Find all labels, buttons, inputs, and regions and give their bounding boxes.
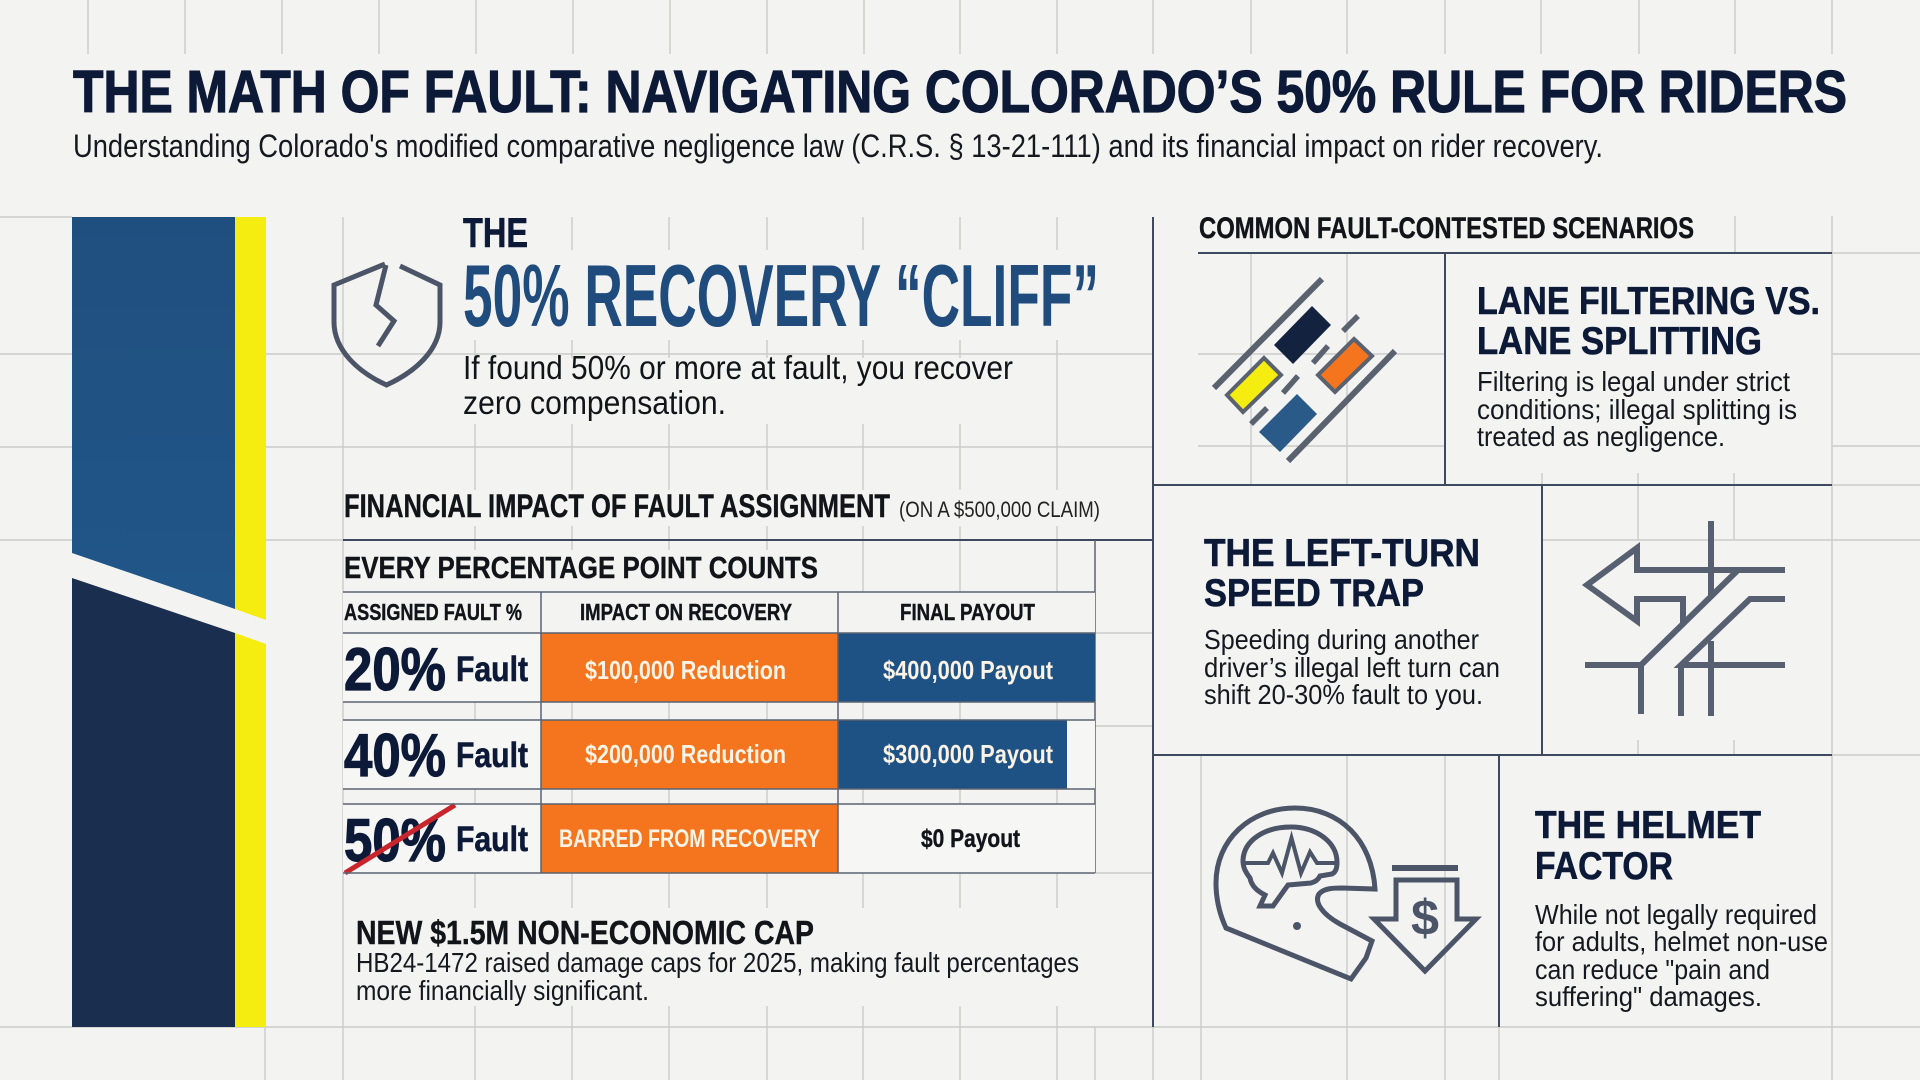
left turn text: Speeding during another — [1204, 624, 1479, 655]
row: 40% fault — [344, 720, 1067, 789]
table header row: IMPACT ON RECOVERY — [580, 599, 792, 625]
cliff description: If found 50% or more at fault, you recover — [463, 349, 1013, 386]
left turn text: SPEED TRAP — [1204, 572, 1424, 615]
table header row — [344, 599, 1035, 625]
icon: down arrow with dollar: $ — [1411, 890, 1439, 946]
callout: non-economic cap: HB24-1472 raised damage caps for 2025, making fault percentages — [356, 947, 1079, 978]
row: 40% fault: $200,000 Reduction — [585, 739, 786, 769]
callout: non-economic cap: more financially significant. — [356, 975, 649, 1006]
left turn text: driver’s illegal left turn can — [1204, 652, 1500, 683]
row: 40% fault: $300,000 Payout — [883, 739, 1053, 769]
helmet text — [1535, 804, 1828, 1012]
icon: down arrow with dollar — [1374, 868, 1476, 971]
row: 50% fault: $0 Payout — [921, 825, 1021, 853]
row: 40% fault: 40% — [344, 722, 446, 789]
lane filtering text: LANE SPLITTING — [1477, 320, 1762, 363]
icon: intersection — [1585, 521, 1785, 716]
helmet text: FACTOR — [1535, 845, 1673, 888]
row: 20% fault: 20% — [344, 636, 446, 703]
lane filtering text — [1477, 280, 1820, 452]
row: 20% fault — [344, 633, 1095, 703]
decorative side bar — [72, 217, 266, 1027]
row: 40% fault: Fault — [456, 736, 528, 775]
cliff description — [463, 349, 1013, 421]
cliff heading small: THE — [463, 209, 528, 256]
row: 20% fault: $400,000 Payout — [883, 655, 1053, 685]
scenario: lane filtering — [1214, 279, 1820, 461]
helmet text: THE HELMET — [1535, 804, 1761, 847]
icon: cracked shield — [334, 264, 440, 385]
row: 50% fault — [344, 804, 1021, 874]
callout: non-economic cap — [356, 914, 1079, 1006]
cliff heading large: 50% RECOVERY “CLIFF” — [463, 246, 1099, 345]
financial heading: FINANCIAL IMPACT OF FAULT ASSIGNMENT — [344, 488, 890, 524]
helmet text: for adults, helmet non-use — [1535, 926, 1828, 957]
icon: lane filtering — [1214, 279, 1395, 461]
row: 50% fault: 50% — [344, 807, 446, 874]
panel: scenarios — [1199, 212, 1828, 1012]
helmet text: While not legally required — [1535, 899, 1817, 930]
panel: financial impact — [343, 488, 1153, 1006]
scenario: left turn — [1204, 521, 1785, 716]
helmet text: can reduce "pain and — [1535, 954, 1770, 985]
table header row: FINAL PAYOUT — [900, 599, 1035, 625]
left turn text: THE LEFT-TURN — [1204, 532, 1480, 575]
lane filtering text: treated as negligence. — [1477, 421, 1725, 452]
row: 20% fault: $100,000 Reduction — [585, 655, 786, 685]
table — [343, 592, 1095, 874]
scenario: helmet — [1216, 804, 1828, 1012]
subtitle: Understanding Colorado's modified comparative negligence law (C.R.S. § 13-21-111) and its financial impact on rider recovery. — [73, 128, 1603, 164]
row: 50% fault: BARRED FROM RECOVERY — [559, 825, 820, 853]
left turn text: shift 20-30% fault to you. — [1204, 679, 1483, 710]
callout: non-economic cap: NEW $1.5M NON-ECONOMIC CAP — [356, 914, 814, 951]
panel: recovery cliff — [334, 209, 1099, 421]
helmet text: suffering" damages. — [1535, 981, 1762, 1012]
table heading: EVERY PERCENTAGE POINT COUNTS — [344, 550, 818, 585]
lane filtering text: LANE FILTERING VS. — [1477, 280, 1820, 323]
left turn text — [1204, 532, 1500, 710]
financial heading: (ON A $500,000 CLAIM) — [899, 497, 1100, 522]
lane filtering text: conditions; illegal splitting is — [1477, 394, 1797, 425]
lane filtering text: Filtering is legal under strict — [1477, 366, 1790, 397]
table header row: ASSIGNED FAULT % — [344, 599, 522, 625]
cliff description: zero compensation. — [463, 384, 726, 421]
icon: helmet with brain — [1216, 808, 1375, 979]
row: 50% fault: Fault — [456, 820, 528, 859]
row: 20% fault: Fault — [456, 650, 528, 689]
scenarios heading: COMMON FAULT-CONTESTED SCENARIOS — [1199, 212, 1694, 245]
